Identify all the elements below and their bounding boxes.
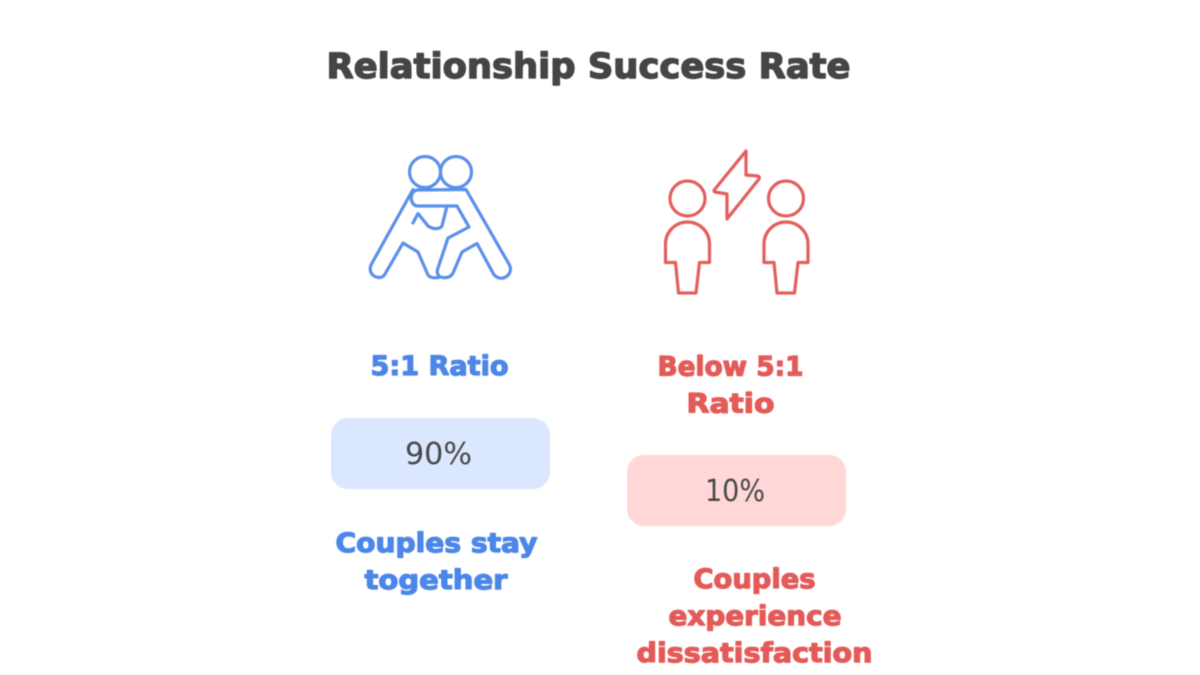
title: Relationship Success Rate [326, 47, 850, 87]
label: 5:1 Ratio: 5:1 Ratio [370, 351, 508, 382]
label: Below 5:1 Ratio: Ratio [686, 388, 774, 420]
icon: embracing couple [370, 156, 510, 278]
caption: couples stay together: together [364, 565, 508, 596]
stat pill: 90% [331, 418, 550, 489]
label: Below 5:1 Ratio: Below 5:1 [658, 352, 804, 382]
panel: below 5:1 ratio [627, 151, 872, 669]
stat pill: 90%: 90% [405, 437, 472, 472]
panel: 5:1 ratio [331, 156, 550, 596]
stat pill: 10% [627, 455, 846, 526]
stat pill: 10%: 10% [705, 474, 765, 509]
caption: couples stay together: Couples stay [336, 528, 538, 559]
icon: two people in conflict [666, 151, 808, 293]
caption: couples experience dissatisfaction: Couples [694, 564, 816, 595]
caption: couples experience dissatisfaction: dissatisfaction [636, 638, 872, 669]
caption: couples experience dissatisfaction: experience [668, 601, 842, 632]
